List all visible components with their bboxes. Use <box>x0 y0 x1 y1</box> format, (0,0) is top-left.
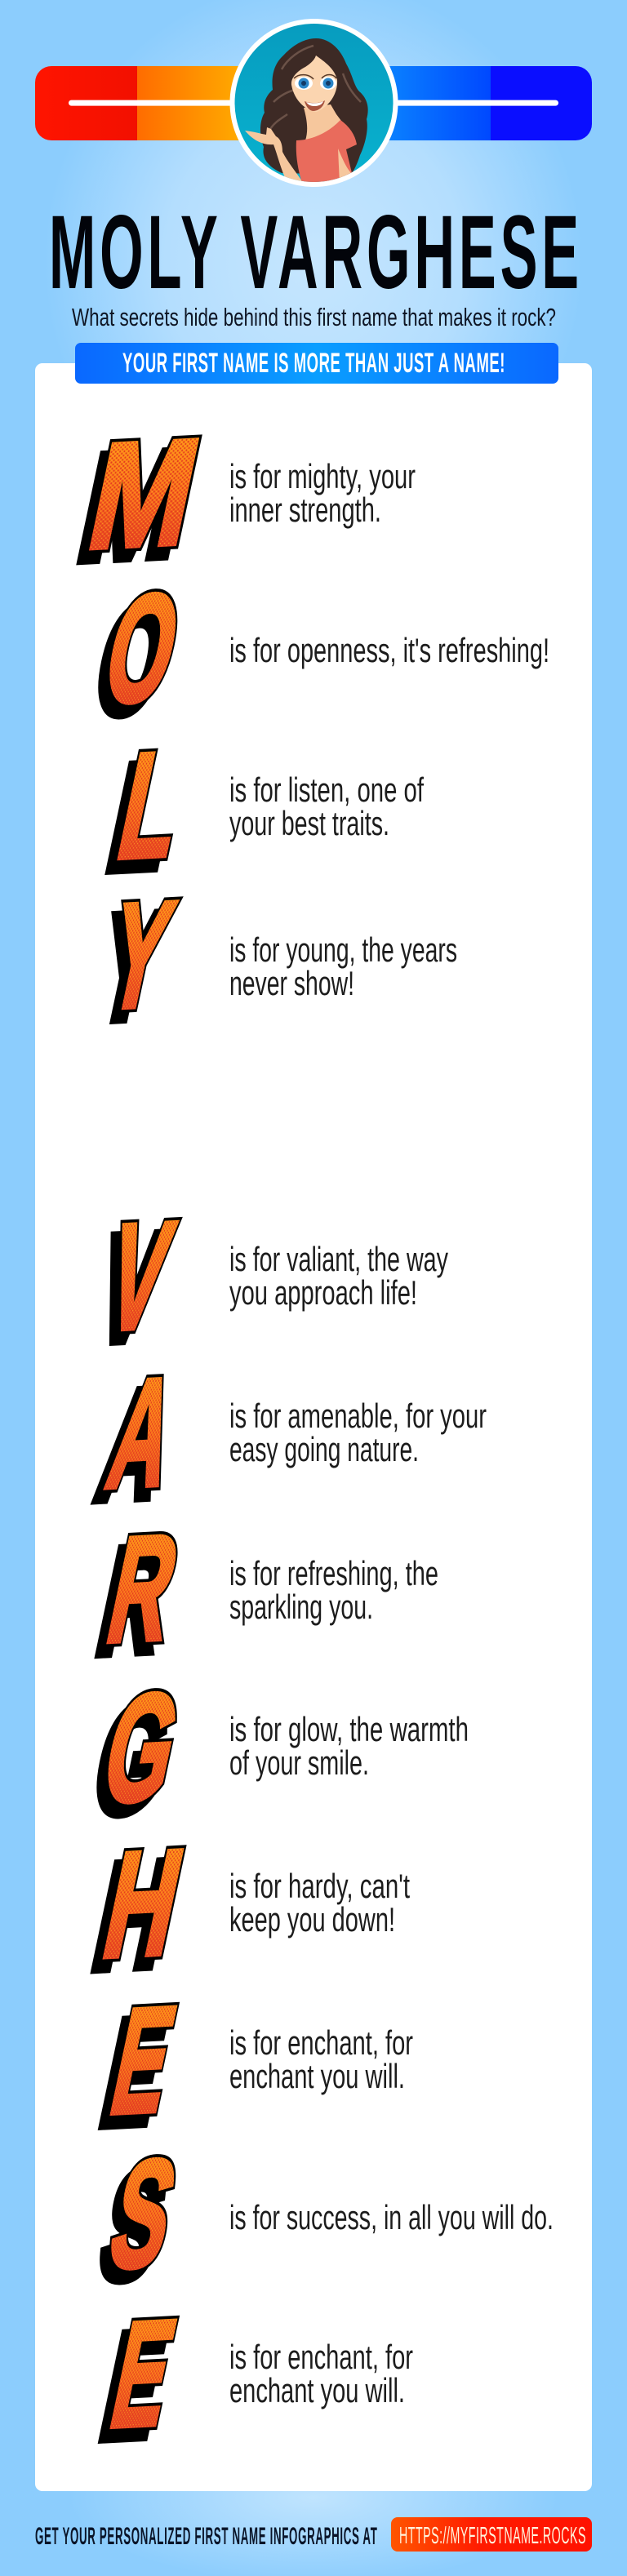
hair <box>260 38 368 175</box>
letter S: S <box>98 2126 189 2301</box>
text: Y: never show! <box>229 964 354 1002</box>
letter A: A <box>87 1357 180 1533</box>
text: L: your best traits. <box>229 804 389 842</box>
header ribbon <box>35 66 592 140</box>
letter G: G <box>91 1659 193 1835</box>
letter L: L <box>106 719 197 890</box>
letter E (last): E <box>100 2288 188 2459</box>
letter R: R <box>86 1515 181 1686</box>
letter R: R <box>96 1503 191 1675</box>
text: Y: is for young, the years <box>229 930 457 969</box>
letter E (last): E <box>100 2288 188 2459</box>
text: H <box>229 1867 410 1939</box>
text: H: is for hardy, can't <box>229 1867 410 1905</box>
letter G: G <box>91 1659 193 1835</box>
letter Y: Y <box>85 882 176 1053</box>
letter O: O <box>92 561 193 735</box>
banner <box>75 343 558 384</box>
text: E (last): is for enchant, for <box>229 2338 413 2376</box>
letter L: L <box>106 719 197 890</box>
text: H: keep you down! <box>229 1900 395 1939</box>
text: E (last): enchant you will. <box>229 2371 405 2409</box>
letter V: V <box>94 1191 185 1363</box>
text: M <box>229 457 416 529</box>
letter V: V <box>84 1202 175 1375</box>
text: E: enchant you will. <box>229 2057 405 2095</box>
text: M: is for mighty, your <box>229 457 416 495</box>
letter S: S <box>98 2126 189 2301</box>
letter H: H <box>91 1819 195 1990</box>
white content panel <box>35 363 592 2491</box>
text: V: you approach life! <box>229 1273 417 1312</box>
letter V: V <box>94 1191 185 1363</box>
text: E <box>229 2023 413 2095</box>
text: A: easy going nature. <box>229 1430 419 1468</box>
letter L: L <box>96 731 187 902</box>
text: L: is for listen, one of <box>229 771 424 809</box>
letter A: A <box>96 1345 189 1521</box>
letter G: G <box>91 1659 193 1835</box>
letter S: S <box>98 2126 189 2301</box>
text: A: is for amenable, for your <box>229 1397 487 1435</box>
text: R <box>229 1554 438 1626</box>
eyes <box>295 77 313 90</box>
ribbon right side <box>389 66 592 140</box>
footer url button <box>391 2517 592 2552</box>
letter E: E <box>100 1974 188 2146</box>
letter O: O <box>92 561 193 735</box>
text: G: of your smile. <box>229 1743 369 1782</box>
text: E (last) <box>229 2338 413 2409</box>
face <box>291 56 337 112</box>
text: G: is for glow, the warmth <box>229 1710 469 1748</box>
letter O: O <box>82 572 183 747</box>
letter H: H <box>82 1830 185 2001</box>
arm and hand <box>245 127 302 183</box>
letter R: R <box>96 1503 191 1675</box>
letter O: O <box>92 561 193 735</box>
letter V: V <box>94 1191 185 1363</box>
letter M: M <box>67 419 202 593</box>
shirt <box>296 120 357 183</box>
mouth <box>305 100 325 111</box>
letter E: E <box>90 1986 178 2157</box>
neck <box>304 104 341 140</box>
letter M: M <box>77 407 212 581</box>
text: A <box>229 1397 487 1468</box>
text: R: sparkling you. <box>229 1588 373 1626</box>
letter Y: Y <box>95 870 185 1042</box>
letter H: H <box>91 1819 195 1990</box>
letter G: G <box>81 1671 183 1846</box>
avatar portrait <box>230 19 398 187</box>
letter M: M <box>77 407 212 581</box>
text: M: inner strength. <box>229 491 381 529</box>
letter E (last): E <box>90 2299 178 2471</box>
text: L <box>229 771 424 842</box>
text: V <box>229 1240 448 1312</box>
letter H: H <box>91 1819 195 1990</box>
letter S: S <box>88 2138 180 2312</box>
letter A: A <box>96 1345 189 1521</box>
text: E: is for enchant, for <box>229 2023 413 2062</box>
letter A: A <box>96 1345 189 1521</box>
letter R: R <box>96 1503 191 1675</box>
letter E: E <box>100 1974 188 2146</box>
letter Y: Y <box>95 870 185 1042</box>
text: G <box>229 1710 469 1782</box>
ribbon left side <box>35 66 240 140</box>
letter E: E <box>100 1974 188 2146</box>
letter Y: Y <box>95 870 185 1042</box>
letter M: M <box>77 407 212 581</box>
text: V: is for valiant, the way <box>229 1240 448 1278</box>
text: R: is for refreshing, the <box>229 1554 438 1592</box>
text: Y <box>229 930 457 1002</box>
letter L: L <box>106 719 197 890</box>
letter E (last): E <box>100 2288 188 2459</box>
